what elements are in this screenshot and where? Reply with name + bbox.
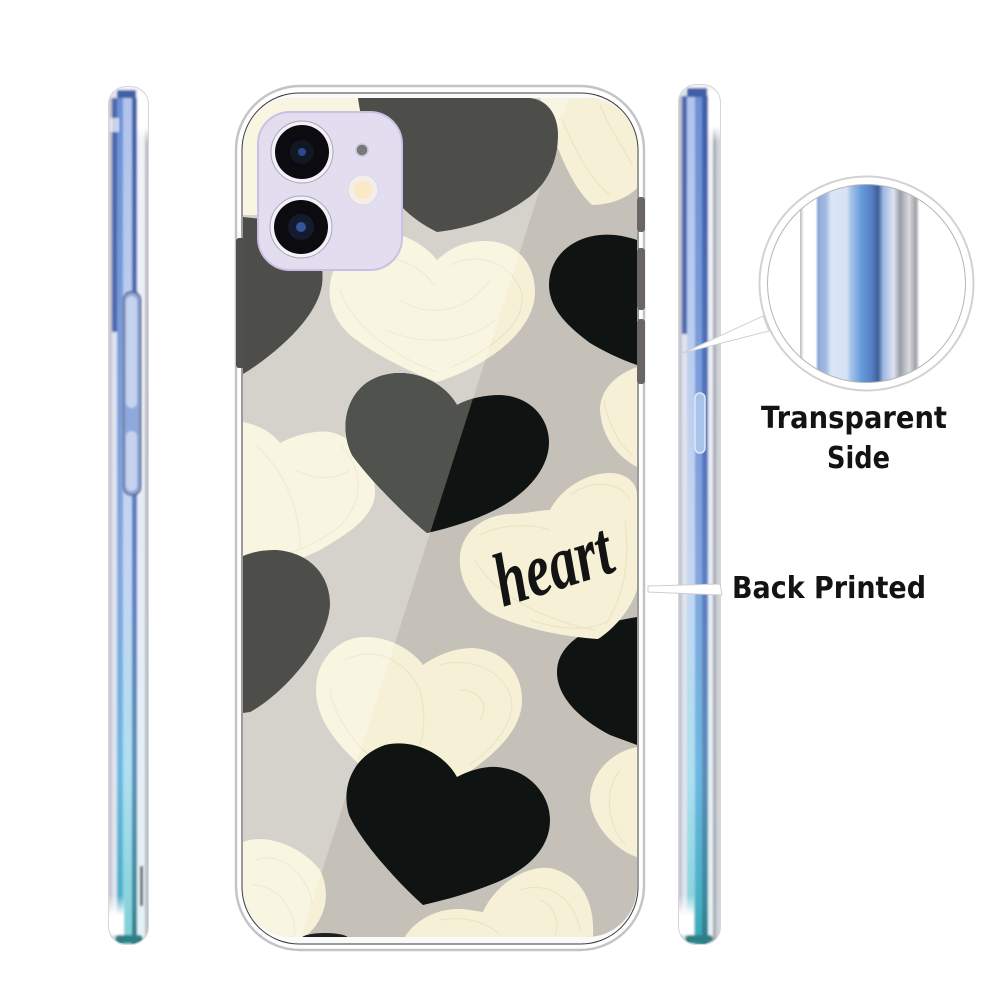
- infographic canvas: [108, 84, 974, 952]
- magnified strip: [800, 185, 920, 382]
- upper lens: [271, 121, 333, 183]
- paint texture strokes: [250, 105, 632, 935]
- camera module: [258, 112, 402, 270]
- black heart lower right: [557, 617, 637, 745]
- flash: [348, 175, 378, 205]
- case outer bumper: [236, 86, 644, 950]
- back print artwork: [243, 98, 637, 943]
- camera plate: [258, 112, 402, 270]
- glass glare: [243, 98, 569, 937]
- magnifier callout: transparent side: [683, 175, 974, 395]
- label: Back Printed: Back Printed: [732, 571, 926, 606]
- right edge button lower: [637, 319, 645, 384]
- microphone: [356, 144, 368, 156]
- cream heart top left: [243, 98, 360, 215]
- label: Transparent Side: [761, 401, 947, 476]
- heart lettering: heart: [483, 506, 625, 623]
- dark grey heart top: [358, 98, 558, 232]
- left side view of case: [108, 86, 149, 945]
- cream heart bottom centre: [405, 868, 593, 937]
- left dark edge button: [236, 238, 245, 368]
- two tone heart centre: [346, 373, 549, 533]
- cream heart left: [243, 422, 375, 558]
- right edge button top: [637, 197, 645, 232]
- magnifier inner edge: [768, 184, 966, 382]
- right side button: [695, 393, 705, 453]
- back printed connector: [648, 584, 722, 595]
- cream heart with lettering: [460, 473, 637, 639]
- label: Transparent Side: Side: [827, 441, 890, 476]
- magnifier pointer: [683, 316, 769, 353]
- left side buttons: [124, 292, 140, 495]
- right edge button middle: [637, 248, 645, 310]
- phone case back: [236, 86, 645, 950]
- cream heart lower centre: [316, 637, 522, 778]
- cream heart centre: [330, 233, 535, 382]
- cream heart top right: [540, 98, 637, 205]
- cream heart lower right: [590, 747, 637, 857]
- black sliver bottom: [302, 933, 348, 937]
- case inner edge: [242, 93, 638, 944]
- dark grey heart lower left: [243, 550, 330, 713]
- large black heart: [346, 743, 550, 905]
- cream heart bottom left: [243, 839, 326, 937]
- lower lens: [270, 196, 332, 258]
- dark grey heart left: [243, 217, 323, 374]
- label: Transparent Side: Transparent: [761, 401, 947, 436]
- right side view of case: [678, 84, 721, 945]
- cream hearts group: [243, 98, 637, 937]
- cream heart right small: [600, 367, 637, 467]
- black heart right: [549, 235, 637, 365]
- magnifier ring: [760, 176, 974, 390]
